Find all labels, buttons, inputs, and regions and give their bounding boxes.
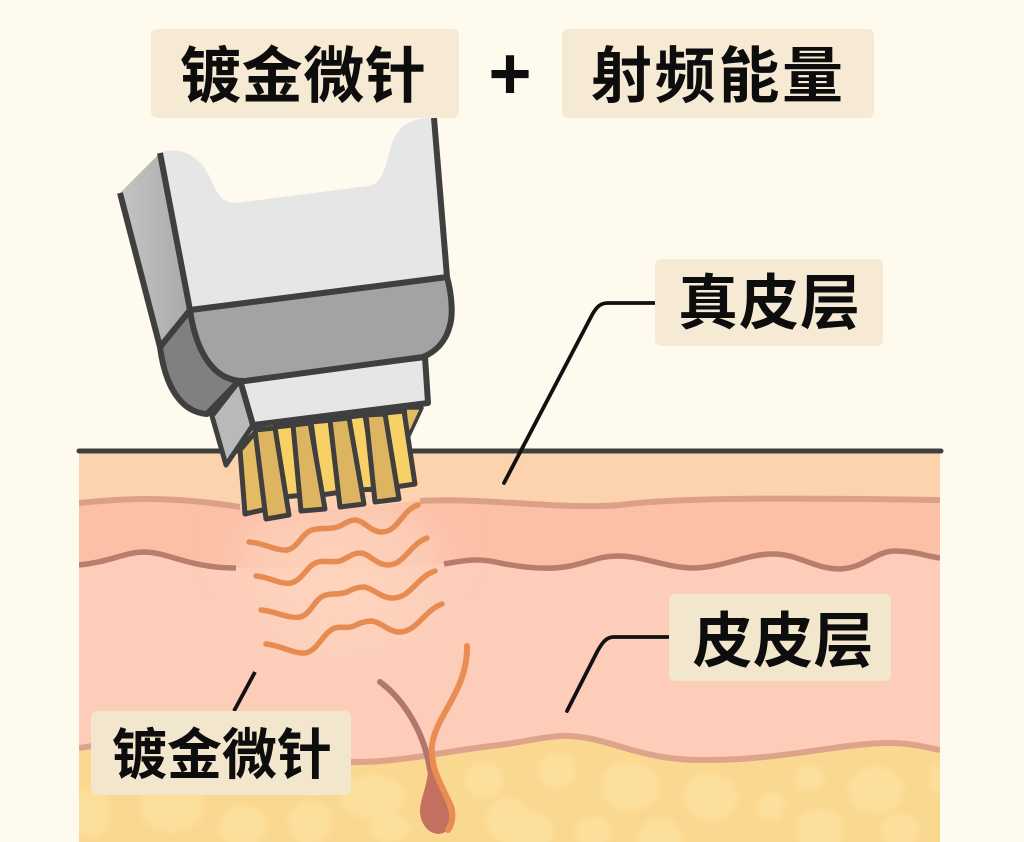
fat boundary line xyxy=(79,736,940,762)
RF energy waves xyxy=(249,505,442,653)
label: dermis: 真皮层 xyxy=(678,270,860,337)
RF soft blend xyxy=(248,510,432,568)
label: gold microneedle title xyxy=(151,29,459,118)
label: subdermis xyxy=(669,594,891,681)
label: dermis xyxy=(655,259,883,346)
dark corner facet xyxy=(160,310,240,414)
gold needles xyxy=(240,408,422,519)
label: RF energy title: 射频能量 xyxy=(591,42,843,110)
epidermis boundary line xyxy=(79,499,940,507)
plus sign: + xyxy=(488,32,532,115)
pointer: dermis xyxy=(504,303,655,483)
hair follicle xyxy=(380,646,467,834)
side panel xyxy=(120,153,190,347)
head left facet xyxy=(212,380,253,465)
microneedle handpiece xyxy=(120,118,452,519)
label: RF energy title xyxy=(562,29,874,118)
dermis lower layer xyxy=(79,551,940,770)
upper body xyxy=(160,118,447,310)
head tip block xyxy=(240,357,428,425)
label: gold needle: 镀金微针 xyxy=(112,724,332,786)
skin cross-section xyxy=(70,452,941,842)
label: subdermis: 皮皮层 xyxy=(692,608,874,675)
pointer: subdermis xyxy=(567,637,669,711)
fat layer xyxy=(79,736,940,842)
label: gold needle xyxy=(91,711,351,795)
label: gold microneedle title: 镀金微针 xyxy=(180,42,426,110)
RF glow xyxy=(205,490,475,690)
dermis upper layer xyxy=(79,499,940,570)
body outlines xyxy=(120,118,447,347)
grey band xyxy=(190,277,452,381)
fat cells xyxy=(70,753,941,842)
skin surface line xyxy=(79,448,941,454)
dermis boundary line xyxy=(79,551,940,569)
pointer: needle xyxy=(234,672,255,711)
epidermis layer xyxy=(79,452,940,512)
